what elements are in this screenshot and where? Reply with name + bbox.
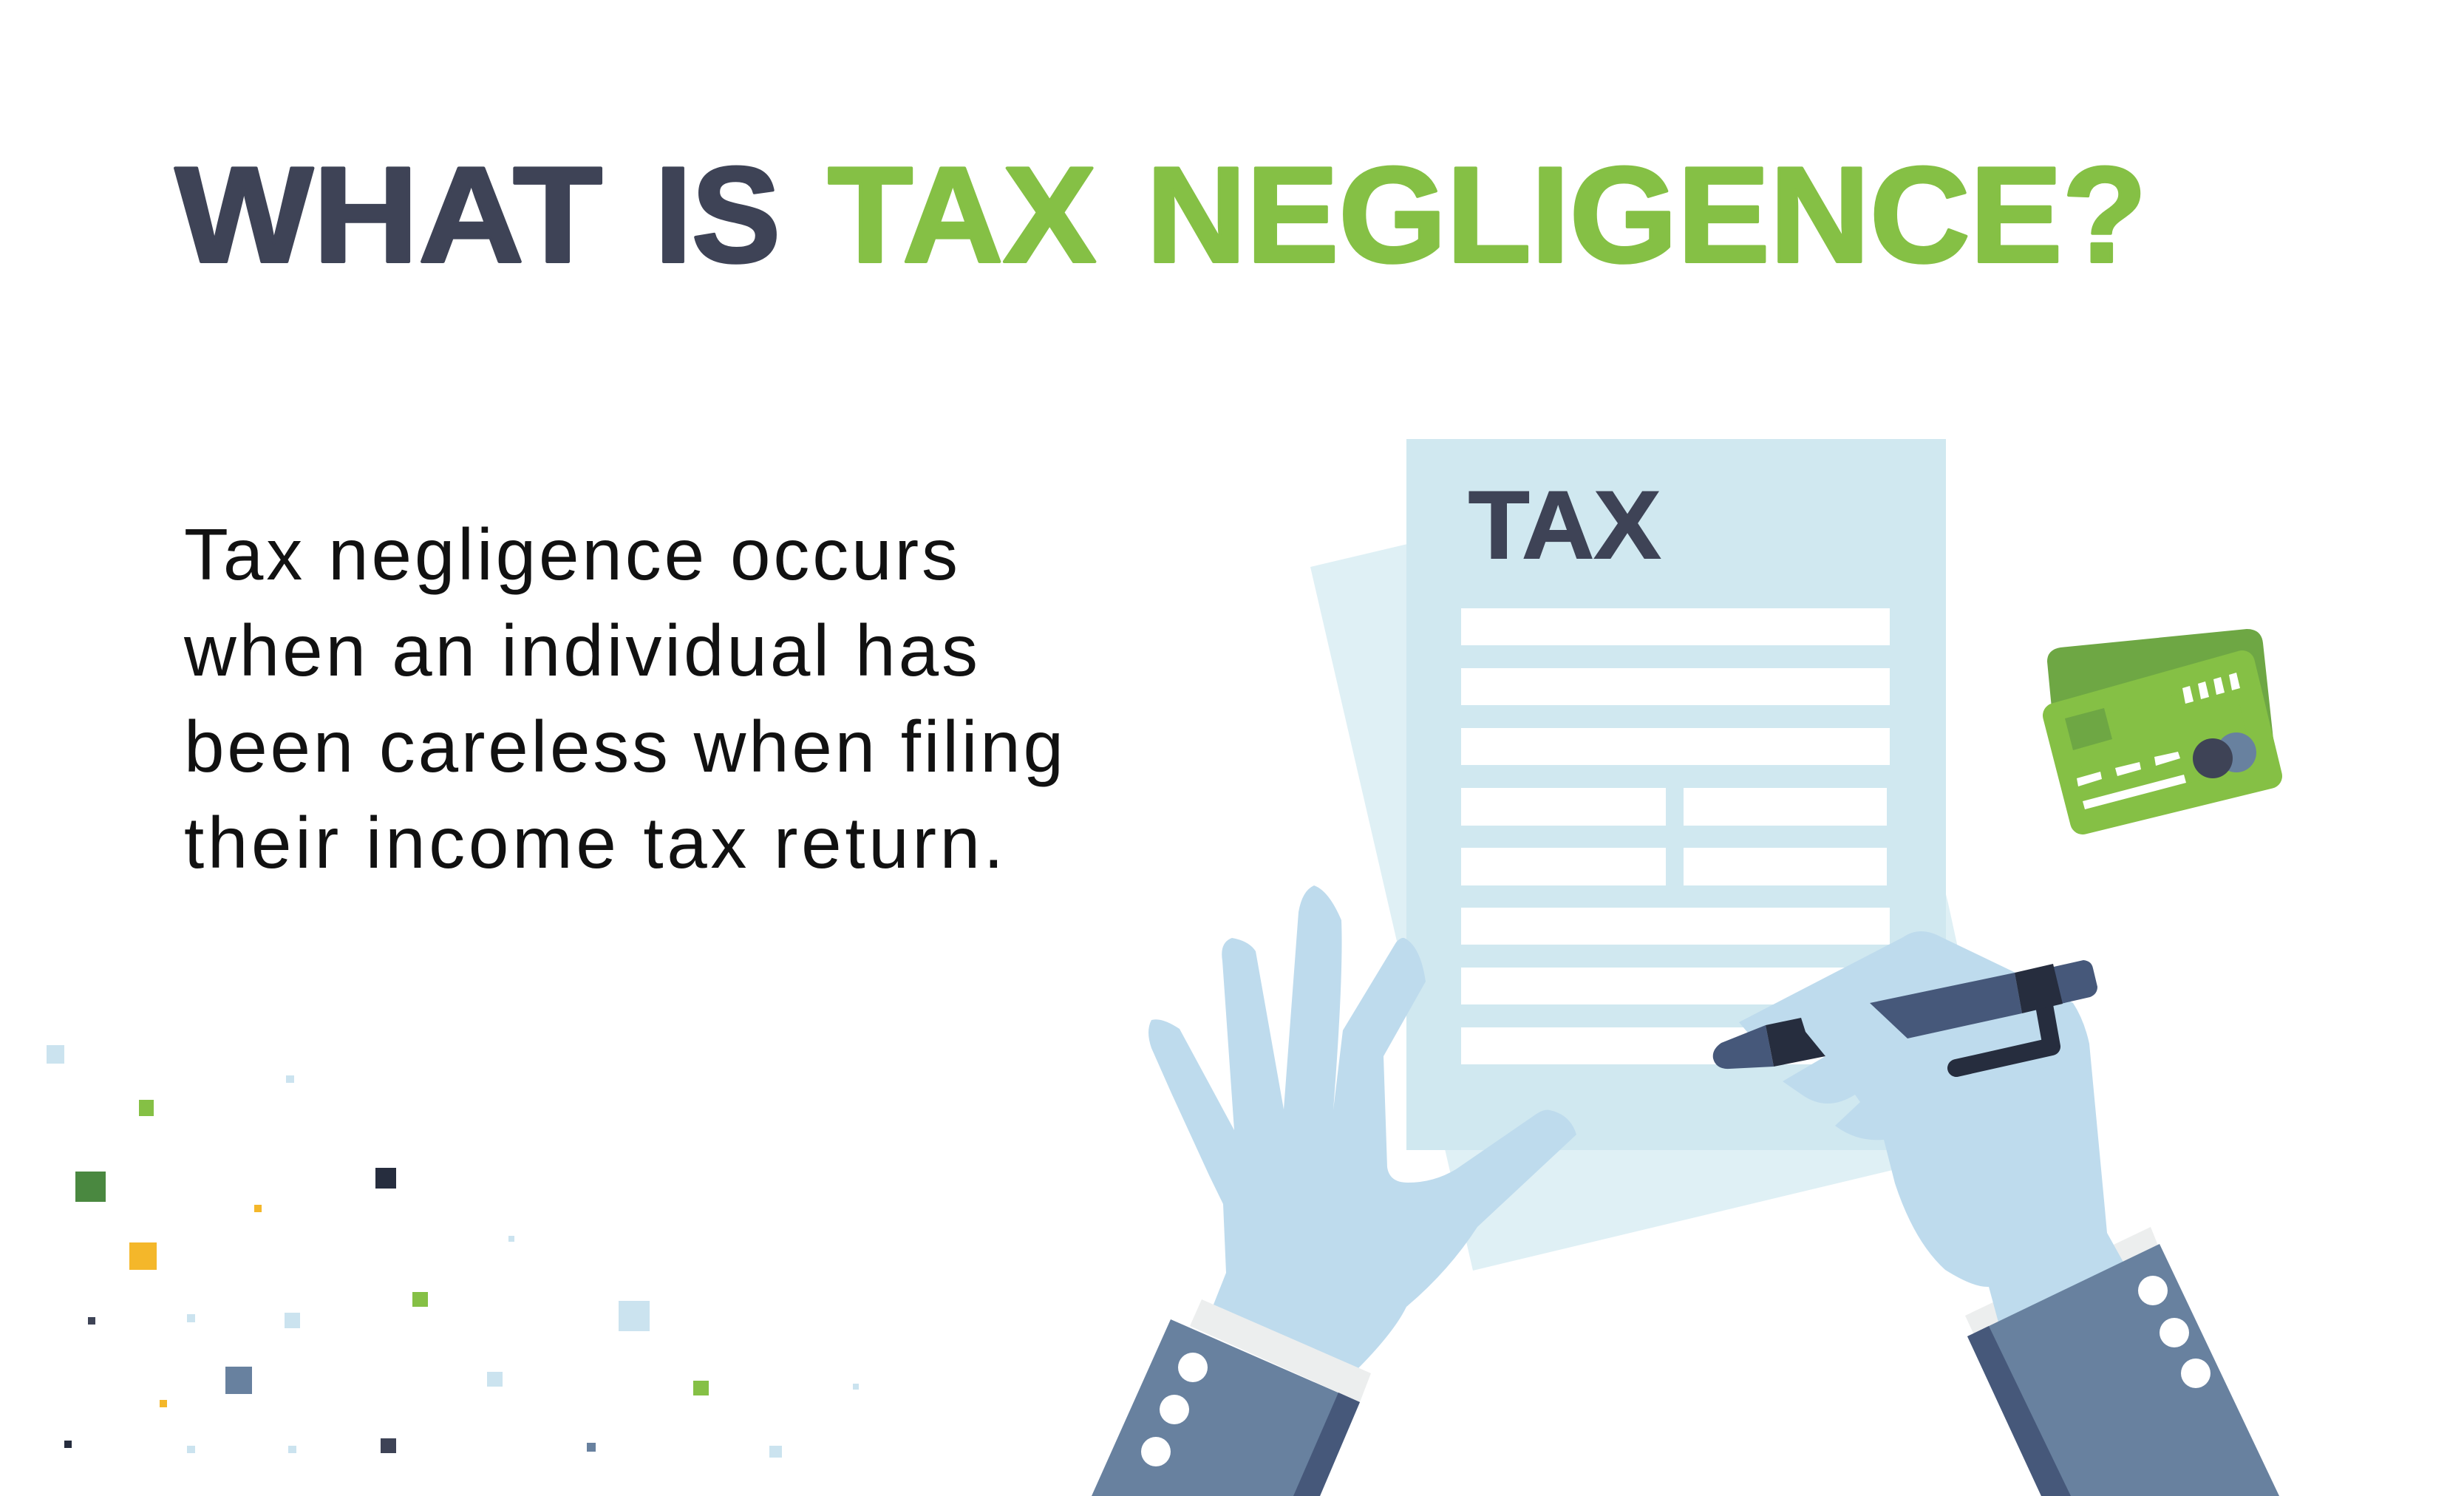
body text: when an individual has xyxy=(183,610,978,691)
body text: their income tax return. xyxy=(184,802,1004,883)
pen barrel xyxy=(1870,973,2022,1038)
sleeve xyxy=(1967,1244,2279,1496)
title: NEGLIGENCE? xyxy=(1146,138,2147,290)
writing hand xyxy=(1739,931,2128,1330)
front card xyxy=(2055,663,2270,822)
pen cap xyxy=(2047,960,2097,1005)
sleeve shadow xyxy=(1293,1393,1360,1496)
title xyxy=(175,138,2147,290)
form rows xyxy=(1461,608,1890,1064)
title: WHAT xyxy=(175,138,602,290)
body text xyxy=(183,514,1063,883)
sleeve xyxy=(1092,1319,1360,1496)
shirt cuff xyxy=(1190,1299,1371,1402)
form heading TAX: TAX xyxy=(1468,471,1661,579)
tax form document xyxy=(1406,439,1946,1150)
left hand with sleeve xyxy=(1092,885,1576,1496)
back card xyxy=(2047,629,2273,739)
icon: credit cards xyxy=(2047,629,2273,822)
pen xyxy=(1713,960,2097,1069)
body text: been careless when filing xyxy=(184,706,1063,787)
card chip xyxy=(2065,708,2112,750)
title: IS xyxy=(655,138,780,290)
title: TAX xyxy=(828,138,1096,290)
back sheet of paper xyxy=(1310,443,2001,1271)
decorative confetti squares xyxy=(47,1045,859,1458)
open hand xyxy=(1148,885,1576,1375)
pen clip xyxy=(1956,1005,2052,1068)
shirt cuff xyxy=(1965,1227,2160,1336)
pen grip xyxy=(1766,1018,1825,1067)
card logo circles xyxy=(2216,732,2256,772)
sleeve shadow xyxy=(1967,1326,2071,1496)
right hand holding pen xyxy=(1713,931,2279,1496)
body text: Tax negligence occurs xyxy=(184,514,958,595)
card markings xyxy=(2077,673,2240,809)
sleeve buttons xyxy=(2138,1276,2211,1388)
sleeve buttons xyxy=(1141,1353,1208,1466)
pen band xyxy=(2015,964,2063,1013)
pen tip xyxy=(1713,1025,1774,1069)
